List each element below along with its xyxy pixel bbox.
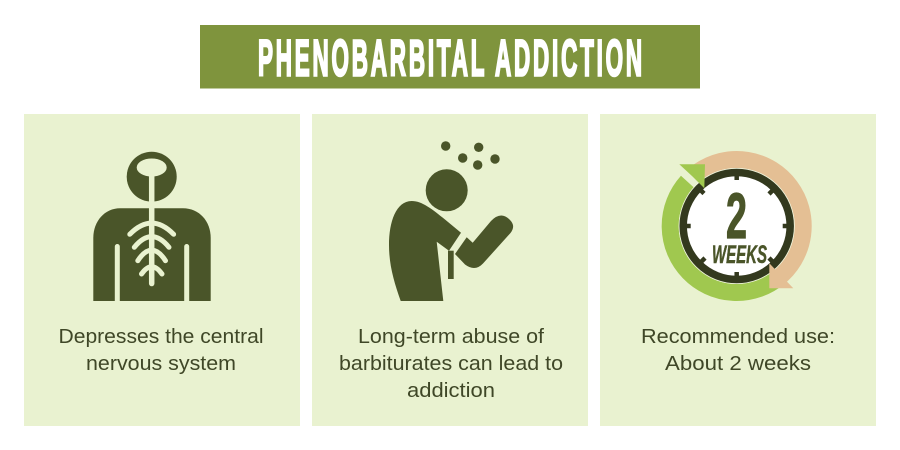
clock label: 2 <box>726 180 747 252</box>
caption <box>58 325 264 375</box>
clock label <box>712 180 767 269</box>
panel: recommended use <box>600 114 876 426</box>
caption: About 2 weeks <box>665 352 811 375</box>
caption: Long-term abuse of <box>358 325 544 348</box>
title banner: PHENOBARBITAL ADDICTION <box>258 30 642 87</box>
icon: clock with cycle arrows <box>670 159 803 293</box>
panel: central nervous system <box>24 114 300 426</box>
caption: addiction <box>407 379 495 402</box>
caption: Depresses the central <box>58 325 264 348</box>
caption: nervous system <box>86 352 236 375</box>
caption <box>339 325 563 402</box>
caption: barbiturates can lead to <box>339 352 563 375</box>
clock label: WEEKS <box>712 241 767 269</box>
icon: hunched person with dizzy dots <box>389 141 513 301</box>
caption: Recommended use: <box>641 325 835 348</box>
icon: human torso with spine <box>93 152 211 303</box>
title banner <box>200 25 700 88</box>
caption <box>641 325 835 375</box>
panel: long-term abuse <box>312 114 588 426</box>
